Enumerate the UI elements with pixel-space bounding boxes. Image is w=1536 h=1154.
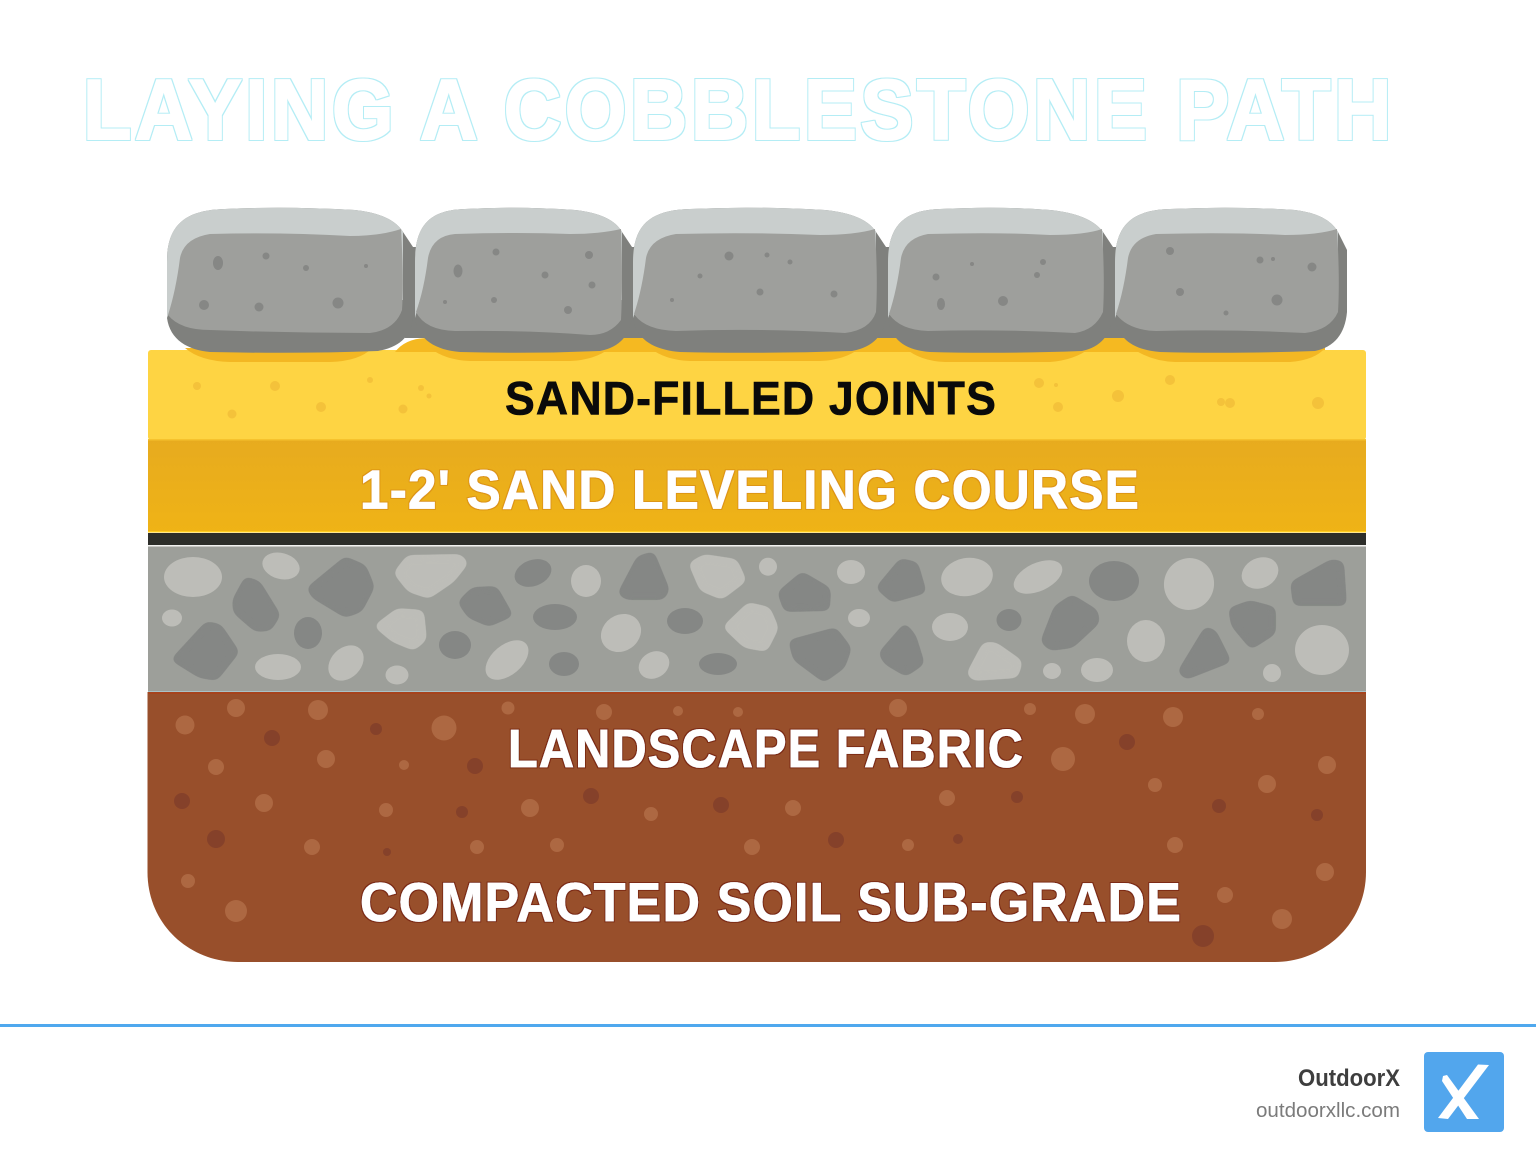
label: sand leveling course: 1-2' SAND LEVELING COURSE <box>360 458 1140 520</box>
layer: sand-filled joints <box>148 338 1366 440</box>
footer website: outdoorxllc.com <box>1256 1100 1400 1122</box>
layer: gravel base <box>148 546 1366 692</box>
layer: compacted soil sub-grade <box>148 691 1366 962</box>
soil dark speckles <box>174 723 1323 947</box>
cobblestone 1 <box>167 208 413 353</box>
sand grains <box>193 375 1324 418</box>
cobblestones row <box>167 208 1347 353</box>
layer: landscape fabric band <box>148 533 1366 547</box>
soil light speckles <box>176 699 1336 929</box>
cobblestone 3 <box>633 208 886 353</box>
cobblestone 2 <box>415 208 632 353</box>
footer divider <box>0 1024 1536 1027</box>
label: sand-filled joints: SAND-FILLED JOINTS <box>505 372 997 424</box>
layer: sand leveling course <box>148 439 1366 532</box>
label: compacted soil sub-grade: COMPACTED SOIL SUB-GRADE <box>360 871 1182 933</box>
footer brand name: OutdoorX <box>1298 1065 1400 1092</box>
dark gravel stones <box>170 551 1347 683</box>
label: landscape fabric: LANDSCAPE FABRIC <box>508 719 1024 779</box>
cobblestone 4 <box>888 208 1113 353</box>
icon: OutdoorX logo <box>1424 1052 1504 1132</box>
cobblestone 5 <box>1115 208 1347 353</box>
light gravel stones <box>162 549 1349 688</box>
title: LAYING A COBBLESTONE PATH <box>83 63 1395 158</box>
